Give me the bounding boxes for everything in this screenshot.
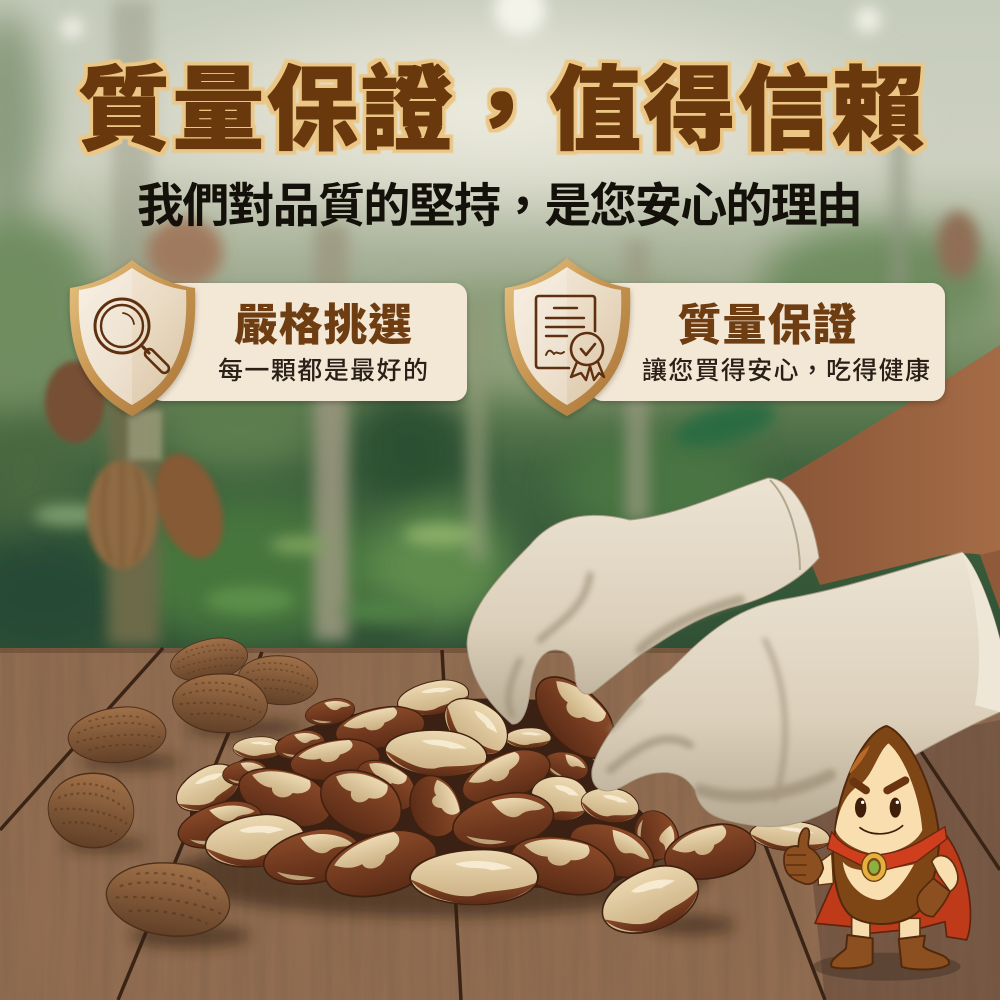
heading: 質量保證 [678, 301, 856, 350]
subtitle: 我們對品質的堅持，是您安心的理由 [137, 179, 863, 232]
shadows under nuts [63, 719, 735, 948]
body and head [833, 726, 939, 924]
pile of shelled brazil nuts [169, 662, 831, 945]
caption: 每一顆都是最好的 [218, 357, 428, 385]
caption: 讓您買得安心，吃得健康 [642, 357, 930, 385]
wooden table [0, 648, 1000, 1000]
red scarf [827, 827, 947, 870]
panel: quality guarantee [505, 258, 945, 416]
boots [831, 935, 949, 970]
shield badge with magnifier icon [70, 260, 195, 416]
legs [852, 915, 920, 942]
background cacao-like pods [45, 361, 235, 569]
card background [590, 283, 945, 401]
eyes [855, 798, 901, 818]
whole brazil nut shells [42, 633, 320, 944]
ground shadow [813, 953, 961, 981]
cape [815, 832, 971, 940]
eyebrows [853, 780, 905, 790]
medallion [862, 853, 886, 881]
forearms [778, 345, 1000, 610]
heading: 嚴格挑選 [234, 301, 412, 350]
smile [860, 826, 903, 834]
right arm with thumbs up [784, 828, 833, 885]
left arm on hip [917, 856, 958, 917]
background: blurred rainforest [0, 0, 1000, 655]
shield badge with certificate icon [505, 258, 630, 416]
gloved left hand picking a nut [467, 478, 819, 724]
title: 質量保證，值得信賴 [78, 60, 924, 162]
panel: strict selection [70, 260, 467, 416]
mascot: brazil nut superhero [784, 726, 971, 981]
gloved right hand [592, 552, 1000, 827]
card background [150, 283, 467, 401]
